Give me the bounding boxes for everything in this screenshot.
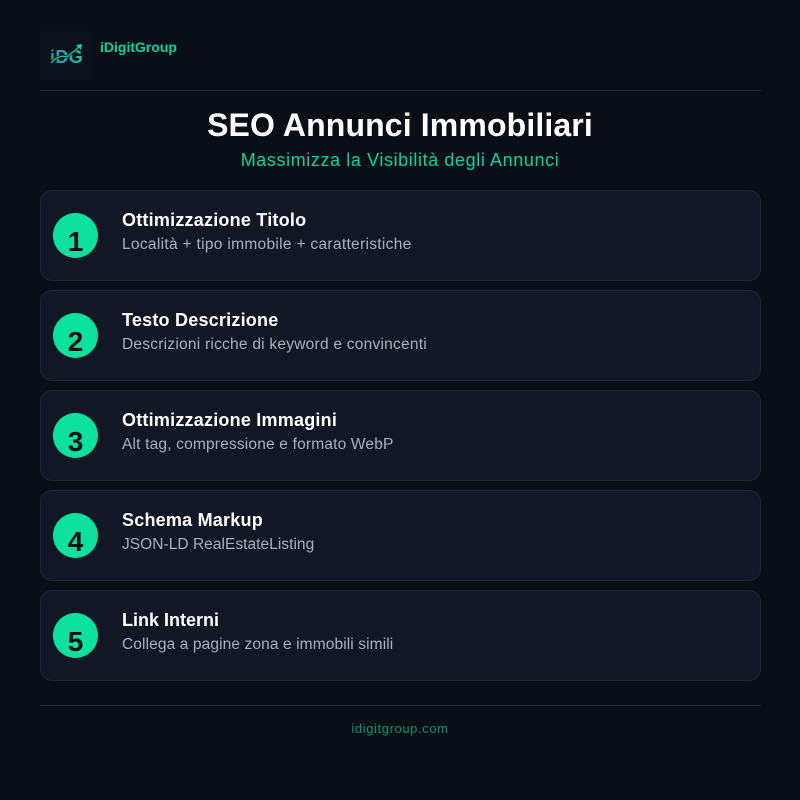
number badge 5: 5 bbox=[68, 626, 83, 657]
footer divider bbox=[40, 705, 761, 706]
card 2: description text bbox=[40, 290, 761, 381]
card 1 description: Località + tipo immobile + caratteristiche bbox=[122, 236, 412, 253]
subtitle: Massimizza la Visibilità degli Annunci bbox=[241, 150, 559, 170]
card 5 description: Collega a pagine zona e immobili simili bbox=[122, 636, 393, 653]
card 1: title optimisation bbox=[40, 190, 761, 281]
title: SEO Annunci Immobiliari bbox=[207, 107, 593, 143]
card 3 heading: Ottimizzazione Immagini bbox=[122, 410, 337, 430]
number badge 1 bbox=[53, 213, 98, 258]
number badge 3: 3 bbox=[68, 426, 83, 457]
number badge 2 bbox=[53, 313, 98, 358]
number badge 4: 4 bbox=[68, 526, 83, 557]
card 5 heading: Link Interni bbox=[122, 610, 219, 630]
logo mark bbox=[40, 30, 90, 80]
card 2 description: Descrizioni ricche di keyword e convincenti bbox=[122, 336, 427, 353]
number badge 2: 2 bbox=[68, 326, 83, 357]
card 4: schema markup bbox=[40, 490, 761, 581]
number badge 1: 1 bbox=[68, 226, 83, 257]
footer url: idigitgroup.com bbox=[351, 721, 449, 736]
number badge 5 bbox=[53, 613, 98, 658]
card 3 description: Alt tag, compressione e formato WebP bbox=[122, 436, 394, 453]
card 2 heading: Testo Descrizione bbox=[122, 310, 278, 330]
card 5: internal links bbox=[40, 590, 761, 681]
card 4 heading: Schema Markup bbox=[122, 510, 263, 530]
number badge 4 bbox=[53, 513, 98, 558]
card 3: image optimisation bbox=[40, 390, 761, 481]
card 4 description: JSON-LD RealEstateListing bbox=[122, 536, 314, 553]
card 1 heading: Ottimizzazione Titolo bbox=[122, 210, 306, 230]
header divider bbox=[40, 90, 761, 91]
brand name: iDigitGroup bbox=[100, 39, 177, 55]
logo mark: iDG bbox=[50, 47, 83, 67]
number badge 3 bbox=[53, 413, 98, 458]
